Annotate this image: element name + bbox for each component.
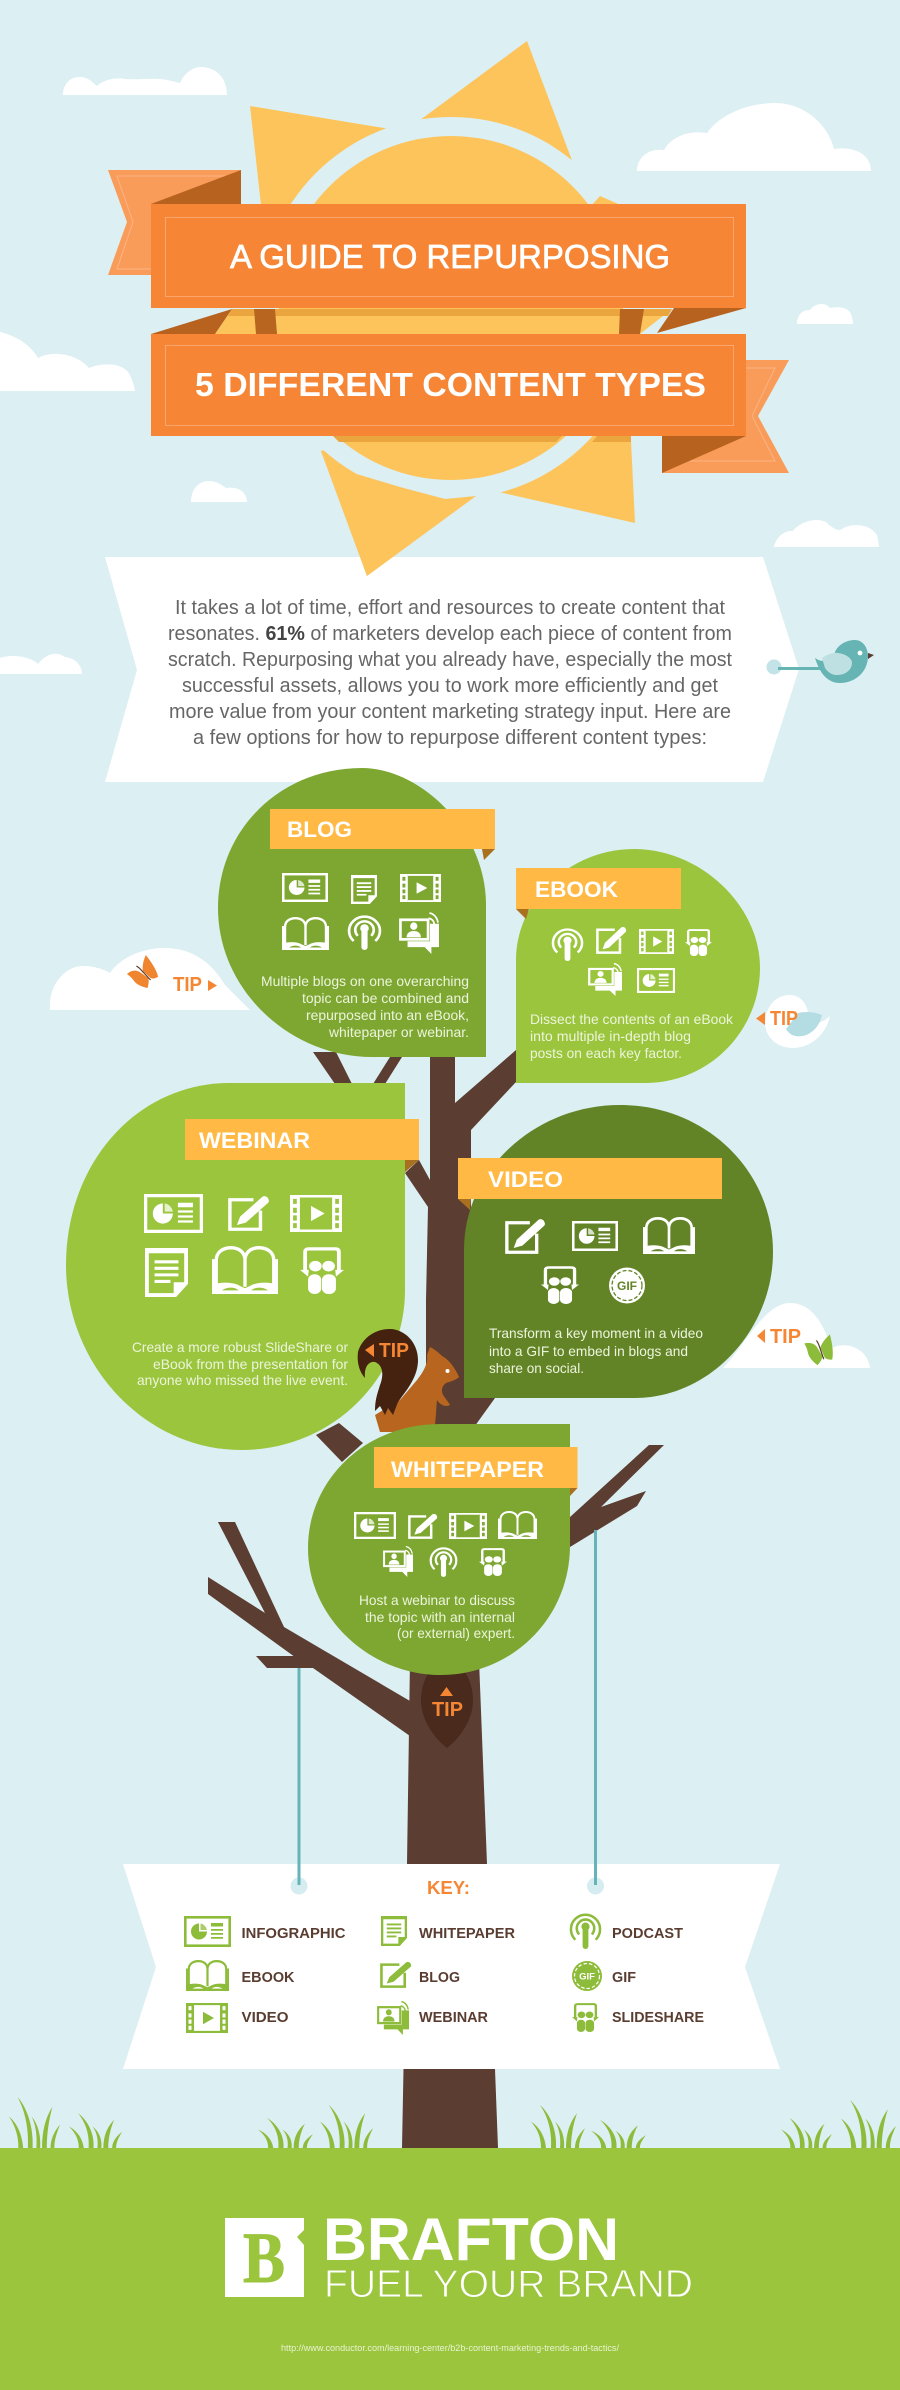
tip: video side: TIP: [770, 1326, 801, 1348]
small cloud right: [797, 304, 853, 324]
intro text: It takes a lot of time, effort and resources to create content that: [175, 597, 725, 619]
right ribbon tail: [662, 360, 789, 473]
brafton logo mark: [225, 2218, 304, 2298]
sun: [215, 41, 672, 576]
key labels: BLOG: [419, 1970, 460, 1986]
intro panel: [105, 557, 799, 782]
key labels: GIF: [612, 1970, 636, 1986]
lower left branch: [208, 1522, 410, 1736]
intro text: more value from your content marketing strategy input. Here are: [169, 701, 731, 723]
video label fold: [458, 1199, 471, 1210]
cloud behind blog leaf: [50, 948, 250, 1010]
video text: Transform a key moment in a video: [489, 1325, 703, 1341]
video label: [458, 1158, 722, 1199]
cloud top left: [63, 67, 227, 95]
left ribbon tail: [108, 170, 241, 275]
cloud left edge: [0, 332, 135, 391]
squirrel: [358, 1329, 459, 1432]
intro text: scratch. Repurposing what you already have, especially the most: [168, 649, 732, 671]
webinar text: Create a more robust SlideShare or: [132, 1339, 348, 1355]
webinar text: eBook from the presentation for: [153, 1356, 348, 1372]
ribbon title: [108, 170, 789, 473]
blog text: repurposed into an eBook,: [306, 1007, 469, 1023]
webinar label fold: [405, 1160, 419, 1172]
tip: butterfly cloud: [127, 955, 217, 996]
whitepaper label: [374, 1447, 578, 1488]
banner one: [151, 204, 746, 308]
key labels: EBOOK: [242, 1970, 295, 1986]
tip: ebook side: TIP: [770, 1008, 798, 1030]
squirrel tail: [358, 1329, 418, 1415]
ground panel: [0, 2148, 900, 2390]
whitepaper label fold: [570, 1488, 578, 1496]
brafton logo mark: B: [243, 2218, 285, 2298]
lower trunk: [407, 1660, 487, 1864]
tree trunk and upper branches: [208, 1050, 664, 2148]
whitepaper text: Host a webinar to discuss: [359, 1592, 515, 1608]
sign pin right: [587, 1864, 604, 1894]
panel: video: [458, 1105, 773, 1398]
blog label: BLOG: [287, 817, 352, 842]
panel: blog: [218, 768, 495, 1057]
key labels: INFOGRAPHIC: [242, 1926, 346, 1942]
title line one: A GUIDE TO REPURPOSING: [230, 238, 670, 275]
ebook icons: [553, 927, 712, 996]
key heading: KEY:: [427, 1878, 470, 1898]
whitepaper label: WHITEPAPER: [391, 1457, 544, 1482]
tagline: FUEL YOUR BRAND: [324, 2263, 693, 2306]
banner two: [151, 334, 746, 436]
key labels: VIDEO: [242, 2010, 288, 2026]
whitepaper text: the topic with an internal: [365, 1609, 515, 1625]
whitepaper icons: [355, 1512, 537, 1577]
blog text: topic can be combined and: [302, 990, 469, 1006]
gif icon: [609, 1268, 645, 1304]
webinar icons: [145, 1195, 344, 1295]
white bird by ebook leaf: [765, 995, 830, 1048]
ebook label: [516, 868, 681, 909]
cloud behind video leaf: [723, 1303, 870, 1368]
key panel: [123, 1864, 780, 2069]
tip: butterfly cloud: TIP: [173, 974, 202, 996]
video label: VIDEO: [488, 1167, 563, 1192]
key labels: PODCAST: [612, 1926, 683, 1942]
key labels: [242, 1926, 704, 2026]
webinar label: WEBINAR: [199, 1128, 310, 1153]
ebook text: posts on each key factor.: [530, 1045, 682, 1061]
grass clumps: [9, 2097, 896, 2148]
gif key icon: GIF: [579, 1972, 595, 1982]
intro text: successful assets, allows you to work more efficiently and get: [182, 675, 718, 697]
small cloud left: [191, 481, 247, 502]
webinar text: anyone who missed the live event.: [137, 1372, 348, 1388]
ebook label fold: [516, 909, 529, 919]
ebook text: into multiple in-depth blog: [530, 1028, 691, 1044]
tip in tree hollow: TIP: [432, 1699, 463, 1721]
video icons: [507, 1218, 695, 1304]
key labels: SLIDESHARE: [612, 2010, 704, 2026]
tip in tree hollow: [421, 1655, 473, 1748]
source url: http://www.conductor.com/learning-center/b2b-content-marketing-trends-and-tactics/: [281, 2343, 619, 2353]
blog label: [270, 809, 495, 849]
whitepaper text: (or external) expert.: [397, 1625, 515, 1641]
ribbon folds: [151, 170, 746, 473]
intro text: a few options for how to repurpose different content types:: [193, 727, 707, 749]
sign pin left: [290, 1864, 308, 1894]
video text: share on social.: [489, 1360, 584, 1376]
key labels: WHITEPAPER: [419, 1926, 516, 1942]
cloud lower right: [774, 520, 879, 547]
gif key icon: [572, 1961, 602, 1991]
trunk base: [402, 2069, 498, 2148]
brafton wordmark: BRAFTON: [323, 2206, 619, 2273]
squirrel tip: TIP: [379, 1340, 409, 1362]
panel: webinar: [66, 1083, 419, 1450]
bird on perch: [766, 640, 874, 683]
hanging sign lines: [298, 1530, 597, 1885]
webinar label: [185, 1119, 419, 1160]
blog icons: [282, 874, 441, 954]
key labels: WEBINAR: [419, 2010, 489, 2026]
tip: ebook side: [756, 1008, 798, 1030]
key icons: [185, 1915, 602, 2035]
ebook text: Dissect the contents of an eBook: [530, 1011, 734, 1027]
cloud top right: [637, 103, 871, 171]
tip: video side: [757, 1326, 841, 1370]
blog label fold: [482, 849, 495, 860]
gif icon: GIF: [617, 1279, 637, 1293]
ebook label: EBOOK: [535, 877, 618, 902]
panel: ebook: [516, 849, 760, 1083]
title line two: 5 DIFFERENT CONTENT TYPES: [195, 366, 706, 403]
lower right branch: [570, 1445, 664, 1547]
blog text: whitepaper or webinar.: [328, 1024, 469, 1040]
blog text: Multiple blogs on one overarching: [261, 973, 469, 989]
video text: into a GIF to embed in blogs and: [489, 1343, 688, 1359]
intro text: resonates. 61% of marketers develop each piece of content from: [168, 623, 738, 645]
panel: whitepaper: [308, 1424, 578, 1675]
cloud beside intro: [0, 654, 82, 674]
